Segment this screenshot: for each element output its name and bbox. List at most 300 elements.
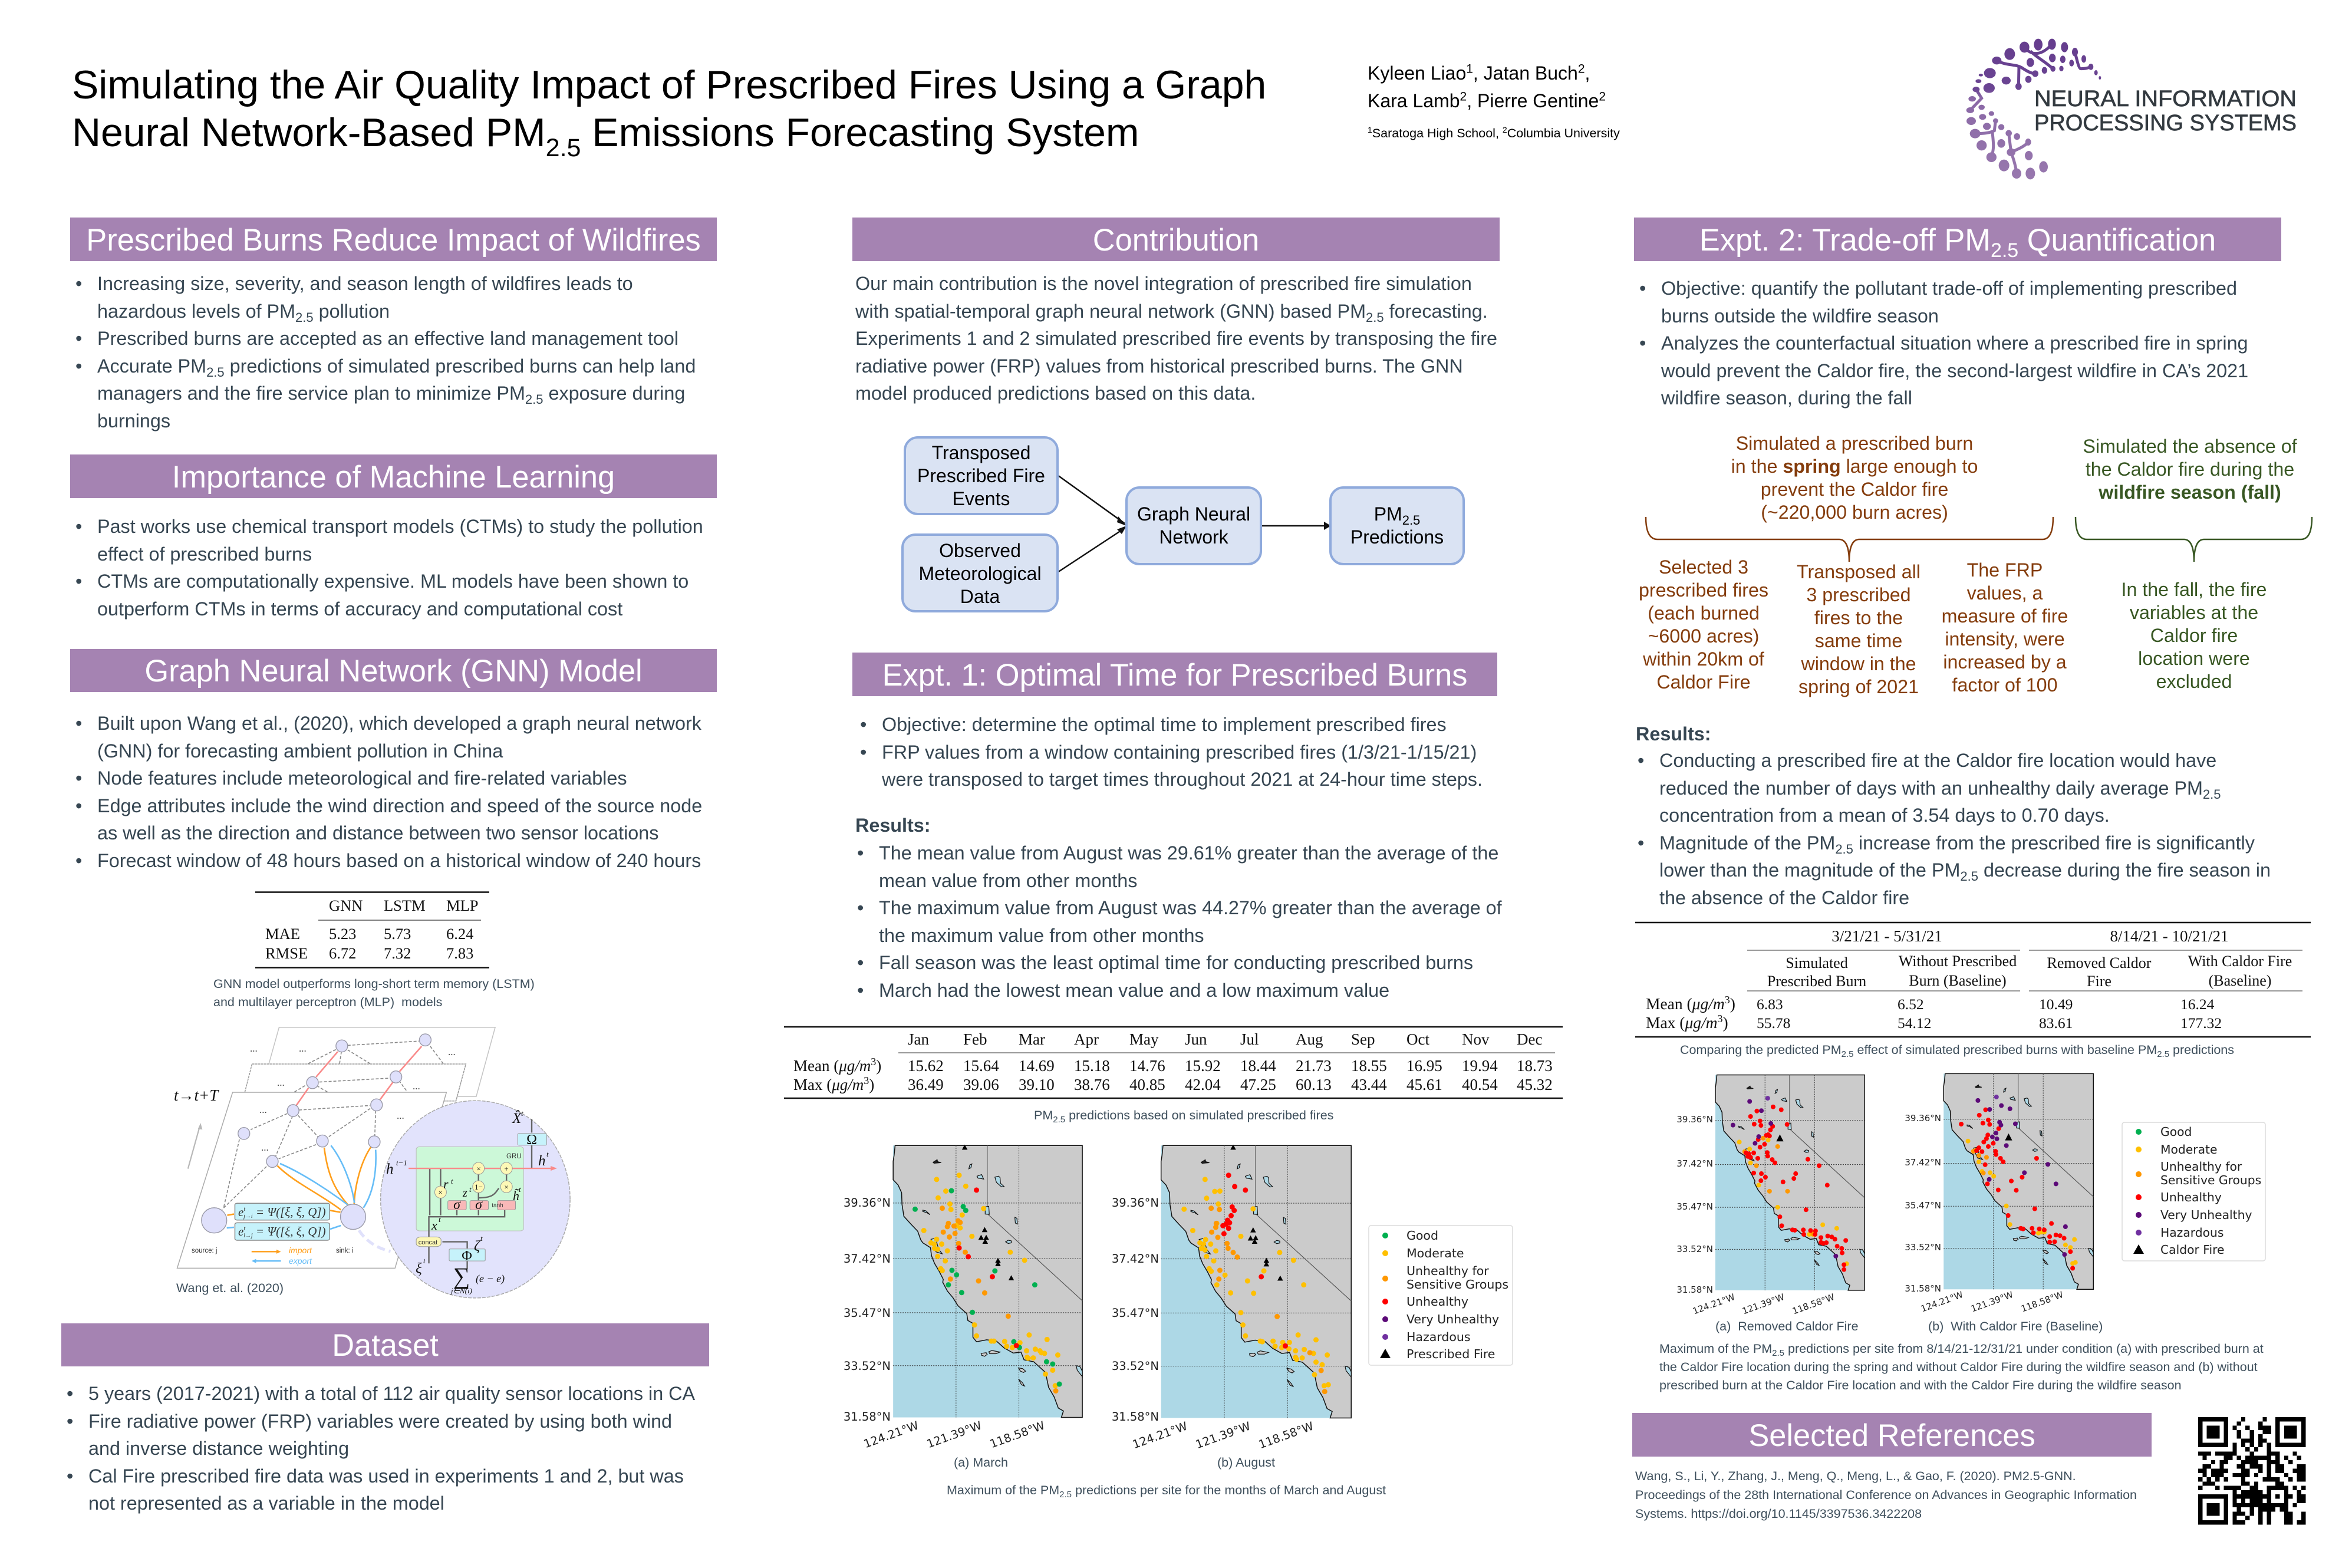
legend: Expt 2 maps: Hazardous <box>2160 1226 2223 1240</box>
step: transposed fires: spring of 2021 <box>1798 676 1919 697</box>
table: model comparison <box>255 892 489 968</box>
table: trade-off PM2.5 values: With Caldor Fire <box>2188 953 2292 970</box>
text: experiment 2 objectives: Objective: quantify the pollutant trade-off of implementing prescribed <box>1661 278 2237 299</box>
text: • <box>1638 832 1644 854</box>
table: trade-off PM2.5 values: ) <box>1730 994 1735 1013</box>
text: dataset bullets: Cal Fire prescribed fire data was used in experiments 1 and 2, but was <box>88 1465 684 1487</box>
text: machine learning bullets: CTMs are computationally expensive. ML models have been shown to <box>97 571 689 592</box>
brace: fall absence <box>2076 517 2312 562</box>
removed Caldor axis labels: 31.58°N <box>1676 1284 1713 1295</box>
text: prescribed burns bullets: Accurate PM2.5 predictions of simulated prescribed burns can help land <box>97 355 696 380</box>
heading: selected references: Selected References <box>1748 1419 2035 1453</box>
text: contribution paragraph: with spatial-temporal graph neural network (GNN) based PM2.5 forecasting. <box>855 301 1488 325</box>
text: GNN model bullets: Edge attributes include the wind direction and speed of the source node <box>97 795 702 816</box>
flow box: meteorological data: Data <box>960 586 1000 607</box>
table: trade-off PM2.5 values: 3 <box>1725 994 1730 1006</box>
caption: trade-off maps: prescribed burn at the Caldor Fire location and with the Caldor Fire during the wildfire season <box>1659 1378 2182 1392</box>
removed Caldor axis labels: 33.52°N <box>1676 1244 1713 1254</box>
caption: model comparison: GNN model outperforms long-short term memory (LSTM) <box>213 977 535 991</box>
table: monthly PM2.5 values: Oct <box>1406 1030 1429 1048</box>
table: monthly PM2.5 values: 45.61 <box>1406 1076 1442 1093</box>
diagram labels: r <box>443 1177 449 1191</box>
text: contribution paragraph <box>855 273 1497 404</box>
legend: Expt 2 maps: Unhealthy for <box>2160 1159 2242 1174</box>
caption: with Caldor map: (b) With Caldor Fire (Baseline) <box>1928 1319 2103 1333</box>
table: trade-off PM2.5 values: Without Prescribed <box>1899 953 2017 970</box>
text: prescribed burns bullets: Increasing size, severity, and season length of wildfires leads to <box>97 273 633 294</box>
table: monthly PM2.5 values: Jul <box>1240 1030 1259 1048</box>
blue export edges <box>227 1145 376 1229</box>
logo dot cluster <box>1966 39 2101 179</box>
caption: trade-off table: Comparing the predicted PM2.5 effect of simulated prescribed burns with baseline PM2.5 predictions <box>1680 1043 2234 1059</box>
callout: fall absence: Simulated the absence of <box>2083 436 2297 457</box>
with Caldor axis labels: 124.21°W <box>1919 1289 1965 1315</box>
table: trade-off PM2.5 values: 6.83 <box>1757 996 1783 1013</box>
text: contribution paragraph: Experiments 1 and 2 simulated prescribed fire events by transposing the fire <box>855 328 1497 349</box>
callout: spring burn: prevent the Caldor fire <box>1761 479 1948 500</box>
text: experiment 2 results: reduced the number of days with an unhealthy daily average PM2.5 <box>1659 778 2221 802</box>
step: fall exclusion <box>2122 579 2267 692</box>
caption: monthly maps: Maximum of the PM2.5 predictions per site for the months of March and August <box>947 1483 1386 1500</box>
text: dataset bullets: 5 years (2017-2021) with a total of 112 air quality sensor locations in CA <box>88 1383 695 1404</box>
text: • <box>857 842 864 864</box>
flow box: meteorological data <box>901 533 1059 612</box>
step: fall exclusion: Caldor fire <box>2150 625 2238 646</box>
heading: GNN model <box>70 649 717 692</box>
step: transposed fires <box>1797 561 1921 697</box>
text: reference: Proceedings of the 28th International Conference on Advances in Geographic Information <box>1635 1488 2137 1502</box>
GRU gates <box>448 1201 515 1210</box>
QR code <box>2198 1417 2305 1524</box>
callout: spring burn: in the spring large enough to <box>1731 456 1978 477</box>
table: monthly PM2.5 values: Mar <box>1019 1030 1045 1048</box>
March map with sites <box>893 1145 1082 1418</box>
title: Neural Network-Based PM2.5 Emissions Forecasting System <box>72 111 1139 162</box>
March axis labels: 124.21°W <box>862 1418 920 1451</box>
table: model comparison: LSTM <box>384 897 426 914</box>
time arrow <box>188 1126 200 1169</box>
table: monthly PM2.5 values: Sep <box>1351 1030 1375 1048</box>
text: experiment 2 objectives: Analyzes the counterfactual situation where a prescribed fire in spring <box>1661 332 2248 354</box>
table: monthly PM2.5 values: Jun <box>1185 1030 1207 1048</box>
with Caldor map with sites <box>1943 1073 2093 1289</box>
text: experiment 2 objectives <box>1639 278 2248 409</box>
step: transposed fires: window in the <box>1801 653 1916 674</box>
legend: Expt 2 maps: Good <box>2160 1125 2192 1139</box>
callout: fall absence <box>2083 436 2297 503</box>
table: monthly PM2.5 values: Apr <box>1074 1030 1099 1048</box>
hidden state line <box>409 1168 553 1169</box>
table: monthly PM2.5 values: 47.25 <box>1240 1076 1276 1093</box>
table: monthly PM2.5 values: Feb <box>963 1030 987 1048</box>
table: model comparison: 5.73 <box>384 925 411 943</box>
import / export legend arrows <box>252 1251 279 1253</box>
map: with Caldor Fire baseline <box>1905 1073 2093 1315</box>
diagram labels: e <box>238 1205 243 1219</box>
figure: GNN architecture diagram: sink: i <box>336 1247 353 1254</box>
table: trade-off PM2.5 values: 177.32 <box>2180 1014 2222 1032</box>
GRU data paths <box>429 1119 532 1269</box>
table: monthly PM2.5 values: 60.13 <box>1296 1076 1332 1093</box>
diagram labels: t <box>521 1109 523 1118</box>
text: GNN model bullets: Built upon Wang et al., (2020), which developed a graph neural network <box>97 713 701 734</box>
text: machine learning bullets <box>75 516 703 620</box>
text: • <box>75 713 82 734</box>
step: transposed fires: Transposed all <box>1797 561 1921 582</box>
step: fall exclusion: excluded <box>2156 671 2232 692</box>
table: monthly PM2.5 values: 38.76 <box>1074 1076 1110 1093</box>
text: experiment 2 objectives: wildfire season, during the fall <box>1661 387 1912 409</box>
diagram labels: h <box>538 1153 546 1169</box>
table: monthly PM2.5 values: 36.49 <box>908 1076 944 1093</box>
text: experiment 2 results <box>1638 750 2271 908</box>
table: monthly PM2.5 values: Dec <box>1517 1030 1542 1048</box>
text: experiment 1 objectives: were transposed to target times throughout 2021 at 24-hour time steps. <box>882 769 1483 790</box>
authors: Kyleen Liao1, Jatan Buch2, <box>1368 62 1590 84</box>
table: trade-off PM2.5 values: Mean ( <box>1646 994 1692 1013</box>
text: experiment 1 objectives: FRP values from a window containing prescribed fires (1/3/21-1/15/21) <box>882 742 1477 763</box>
table: monthly PM2.5 values: 21.73 <box>1296 1057 1332 1075</box>
heading: experiment 1: Expt. 1: Optimal Time for Prescribed Burns <box>882 658 1467 693</box>
diagram labels: h̃ <box>513 1188 519 1203</box>
removed Caldor axis labels: 35.47°N <box>1676 1201 1713 1212</box>
table: trade-off PM2.5 values: Prescribed Burn <box>1767 973 1866 990</box>
text: GNN model bullets: Node features include meteorological and fire-related variables <box>97 767 627 789</box>
removed Caldor axis labels: 118.58°W <box>1791 1292 1836 1317</box>
text: experiment 2 objectives: burns outside the wildfire season <box>1661 305 1939 327</box>
table: monthly PM2.5 values: μg/m <box>838 1057 871 1075</box>
table: monthly PM2.5 values: 19.94 <box>1462 1057 1498 1075</box>
step: fall exclusion: In the fall, the fire <box>2122 579 2267 600</box>
text: experiment 1 objectives <box>860 714 1483 790</box>
GRU box <box>416 1147 523 1231</box>
table: trade-off PM2.5 values: Burn (Baseline) <box>1909 972 2007 989</box>
text: prescribed burns bullets: burnings <box>97 410 170 431</box>
flow box: graph neural network: Graph Neural <box>1137 503 1250 525</box>
diagram labels: i→j <box>243 1233 253 1239</box>
legend: Expt 2 maps <box>2122 1122 2265 1261</box>
text: • <box>1639 278 1646 299</box>
removed Caldor axis labels: 124.21°W <box>1691 1292 1737 1317</box>
with Caldor axis labels: 33.52°N <box>1905 1242 1941 1253</box>
text: experiment 1 results <box>857 842 1502 1001</box>
table: trade-off PM2.5 values: 55.78 <box>1757 1014 1790 1032</box>
flow box: PM2.5 predictions: PM2.5 <box>1374 503 1420 528</box>
text: reference: Wang, S., Li, Y., Zhang, J., Meng, Q., Meng, L., & Gao, F. (2020). PM2.5-GNN. <box>1635 1469 2076 1483</box>
title <box>72 63 1266 162</box>
caption: trade-off maps: Maximum of the PM2.5 predictions per site from 8/14/21-12/31/21 under condition (a) with prescribed burn at <box>1659 1342 2264 1358</box>
step: transposed fires: same time <box>1815 630 1902 651</box>
GRU detail circle <box>381 1101 570 1298</box>
flow box: PM2.5 predictions <box>1329 486 1465 565</box>
August axis labels <box>1112 1196 1315 1451</box>
text: • <box>75 571 82 592</box>
flow box: graph neural network: Network <box>1159 526 1228 548</box>
diagram labels <box>174 1043 549 1295</box>
text: prescribed burns bullets <box>75 273 696 431</box>
step: fall exclusion: variables at the <box>2130 602 2258 623</box>
caption: model comparison: and multilayer perceptron (MLP) models <box>213 995 442 1009</box>
legend: Expt 1 maps: Prescribed Fire <box>1406 1347 1495 1361</box>
March axis labels: 35.47°N <box>844 1306 891 1320</box>
step: FRP values: intensity, were <box>1945 628 2065 650</box>
callout: spring burn <box>1731 433 1978 523</box>
text: GNN model bullets: as well as the direction and distance between two sensor locations <box>97 822 658 844</box>
diagram labels: t <box>469 1185 472 1194</box>
March axis labels: 118.58°W <box>988 1418 1046 1451</box>
table: monthly PM2.5 values: 15.18 <box>1074 1057 1110 1075</box>
table: monthly PM2.5 values: 39.10 <box>1019 1076 1055 1093</box>
step: fall exclusion: location were <box>2138 648 2250 669</box>
heading: contribution: Contribution <box>1093 223 1259 258</box>
removed Caldor map with sites <box>1715 1075 1865 1290</box>
output and phi boxes <box>518 1134 546 1145</box>
text: • <box>75 355 82 377</box>
text: • <box>67 1411 73 1432</box>
diagram labels: h <box>386 1161 394 1177</box>
text: experiment 1 results: mean value from other months <box>879 870 1137 891</box>
logo wordmark <box>2034 87 2297 136</box>
dashed graph edges <box>222 1041 443 1209</box>
diagram labels: X̂ <box>512 1110 522 1126</box>
March axis labels <box>844 1196 1046 1451</box>
August axis labels: 31.58°N <box>1112 1410 1159 1424</box>
table: model comparison: GNN <box>329 897 363 914</box>
diagram labels: × <box>476 1164 481 1173</box>
table: trade-off PM2.5 values: 54.12 <box>1898 1014 1931 1032</box>
graph nodes <box>202 1034 431 1233</box>
table: model comparison: 6.24 <box>446 925 473 943</box>
text: experiment 1 results: The maximum value from August was 44.27% greater than the average of <box>879 897 1502 918</box>
table: monthly PM2.5 values: May <box>1129 1030 1159 1048</box>
step: selected fires <box>1639 556 1768 693</box>
table: model comparison: 7.83 <box>446 944 473 962</box>
step: FRP values: increased by a <box>1943 651 2067 673</box>
August axis labels: 39.36°N <box>1112 1196 1159 1210</box>
figure: GNN architecture diagram <box>174 1027 570 1298</box>
text: GNN model bullets <box>75 713 702 871</box>
diagram labels: × <box>504 1182 509 1191</box>
text: • <box>860 742 867 763</box>
table: trade-off PM2.5 values: 10.49 <box>2039 996 2073 1013</box>
legend: Expt 1 maps: Unhealthy for <box>1406 1264 1489 1278</box>
table: monthly PM2.5 values: 45.32 <box>1517 1076 1553 1093</box>
legend: Expt 1 maps: Hazardous <box>1406 1330 1471 1344</box>
August axis labels: 37.42°N <box>1112 1252 1159 1266</box>
diagram labels: Ω <box>526 1132 537 1148</box>
text: prescribed burns bullets: managers and the fire service plan to minimize PM2.5 exposure during <box>97 383 685 407</box>
text: dataset bullets <box>67 1383 695 1514</box>
table: trade-off PM2.5 values <box>1635 923 2311 1037</box>
August axis labels: 35.47°N <box>1112 1306 1159 1320</box>
diagram labels: x <box>431 1218 437 1233</box>
diagram labels: ... <box>259 1104 267 1115</box>
text: contribution paragraph: model produced predictions based on this data. <box>855 383 1256 404</box>
figure: GNN architecture diagram: export <box>289 1256 312 1266</box>
March axis labels: 33.52°N <box>844 1359 891 1373</box>
brace: spring burn <box>1646 517 2053 562</box>
text: contribution paragraph: Our main contribution is the novel integration of prescribed fire simulation <box>855 273 1472 294</box>
red temporal edges <box>297 1046 421 1105</box>
table: model comparison: RMSE <box>265 944 308 962</box>
table: trade-off PM2.5 values: 8/14/21 - 10/21/21 <box>2110 927 2228 945</box>
table: trade-off PM2.5 values: ) <box>1723 1013 1728 1032</box>
caption: removed Caldor map: (a) Removed Caldor Fire <box>1715 1319 1859 1333</box>
table: monthly PM2.5 values: 18.44 <box>1240 1057 1276 1075</box>
heading: experiment 2 <box>1634 218 2281 261</box>
text: experiment 2 results: concentration from a mean of 3.54 days to 0.70 days. <box>1659 805 2110 826</box>
diagram labels: z <box>462 1187 467 1200</box>
diagram labels: j∈N(i) <box>450 1286 472 1295</box>
diagram labels: t <box>243 1206 245 1213</box>
step: FRP values: measure of fire <box>1942 605 2068 627</box>
flow box: meteorological data: Meteorological <box>918 563 1042 584</box>
text: experiment 1 results: The mean value from August was 29.61% greater than the average of the <box>879 842 1498 864</box>
table: monthly PM2.5 values: 15.64 <box>963 1057 999 1075</box>
legend: Expt 2 maps: Unhealthy <box>2160 1190 2222 1204</box>
diagram labels: ξ <box>416 1261 422 1277</box>
legend: Expt 1 maps: Very Unhealthy <box>1406 1312 1499 1326</box>
table: monthly PM2.5 values: 43.44 <box>1351 1076 1387 1093</box>
table: monthly PM2.5 values: 18.55 <box>1351 1057 1387 1075</box>
authors <box>1368 62 1606 111</box>
diagram labels: = Ψ([ξ, ξ, Q]) <box>253 1205 326 1219</box>
diagram labels: e <box>238 1224 243 1238</box>
removed Caldor axis labels: 39.36°N <box>1676 1114 1713 1125</box>
diagram labels: σ <box>453 1197 461 1213</box>
text: • <box>75 516 82 537</box>
flow box: PM2.5 predictions: Predictions <box>1350 526 1444 548</box>
caption: map a: (a) March <box>954 1455 1008 1470</box>
table: monthly PM2.5 values: 3 <box>864 1075 869 1086</box>
heading: contribution <box>852 218 1500 261</box>
diagram labels: (e − e) <box>476 1273 505 1285</box>
text: • <box>1638 750 1644 771</box>
text: GNN model bullets: Forecast window of 48 hours based on a historical window of 240 hours <box>97 850 701 871</box>
flow box: transposed fire events: Transposed <box>932 442 1030 463</box>
table: trade-off PM2.5 values: Removed Caldor <box>2047 954 2152 971</box>
step: selected fires: ~6000 acres) <box>1648 625 1759 647</box>
with Caldor axis labels: 35.47°N <box>1905 1200 1941 1211</box>
diagram labels: ζ <box>474 1238 481 1254</box>
diagram labels: ... <box>299 1043 307 1054</box>
with Caldor axis labels: 121.39°W <box>1969 1289 2015 1315</box>
step: selected fires: (each burned <box>1648 602 1760 624</box>
equation boxes <box>235 1203 330 1220</box>
with Caldor axis labels <box>1905 1113 2065 1315</box>
table: monthly PM2.5 values <box>784 1027 1563 1098</box>
with Caldor axis labels: 37.42°N <box>1905 1157 1941 1168</box>
table: trade-off PM2.5 values: 3/21/21 - 5/31/21 <box>1831 927 1942 945</box>
caption: diagram source: Wang et. al. (2020) <box>176 1281 284 1295</box>
table: monthly PM2.5 values: ) <box>869 1076 874 1093</box>
table: monthly PM2.5 values: Max ( <box>793 1076 832 1093</box>
text: experiment 2 objectives: would prevent the Caldor fire, the second-largest wildfire in CA’s 2021 <box>1661 360 2248 381</box>
affiliations: 1Saratoga High School, 2Columbia University <box>1368 125 1620 140</box>
caption: monthly table: PM2.5 predictions based on simulated prescribed fires <box>1034 1108 1333 1125</box>
authors: Kara Lamb2, Pierre Gentine2 <box>1368 90 1606 111</box>
table: monthly PM2.5 values: 16.95 <box>1406 1057 1442 1075</box>
step: selected fires: Caldor Fire <box>1656 671 1751 693</box>
text: experiment 1 results: March had the lowest mean value and a low maximum value <box>879 980 1389 1001</box>
removed Caldor axis labels: 121.39°W <box>1741 1292 1786 1317</box>
heading: dataset: Dataset <box>332 1329 439 1363</box>
text: experiment 2 results: lower than the magnitude of the PM2.5 decrease during the fire season in <box>1659 859 2271 884</box>
table: trade-off PM2.5 values: 3 <box>1718 1013 1723 1025</box>
removed Caldor axis labels: 37.42°N <box>1676 1158 1713 1169</box>
text: experiment 1 results: Fall season was the least optimal time for conducting prescribed burns <box>879 952 1473 973</box>
table: model comparison: 5.23 <box>329 925 356 943</box>
GRU operators <box>416 1162 512 1247</box>
diagram labels: ... <box>277 1077 285 1088</box>
legend: Expt 1 maps <box>1369 1226 1513 1365</box>
heading: experiment 2: Expt. 2: Trade-off PM2.5 Quantification <box>1699 223 2216 262</box>
text: • <box>75 328 82 349</box>
step: selected fires: within 20km of <box>1643 648 1764 670</box>
table: trade-off PM2.5 values: (Baseline) <box>2209 972 2271 989</box>
legend: Expt 2 maps: Sensitive Groups <box>2160 1173 2261 1187</box>
text: prescribed burns bullets: hazardous levels of PM2.5 pollution <box>97 301 390 325</box>
callout: spring burn: Simulated a prescribed burn <box>1736 433 1973 454</box>
table: trade-off PM2.5 values: Max ( <box>1646 1013 1685 1032</box>
table: trade-off PM2.5 values: μg/m <box>1684 1013 1718 1032</box>
diagram labels: j→i <box>242 1213 253 1220</box>
step: FRP values: The FRP <box>1967 559 2043 581</box>
callout: fall absence: wildfire season (fall) <box>2099 482 2281 503</box>
callout: fall absence: the Caldor fire during the <box>2086 459 2294 480</box>
label: experiment 1 results: Results: <box>855 815 931 836</box>
text: • <box>75 795 82 816</box>
table: trade-off PM2.5 values: Fire <box>2087 973 2111 990</box>
table: monthly PM2.5 values: Aug <box>1296 1030 1323 1048</box>
legend: Expt 1 maps: Sensitive Groups <box>1406 1277 1508 1292</box>
callout: spring burn: (~220,000 burn acres) <box>1761 502 1948 523</box>
August map with sites <box>1161 1145 1351 1418</box>
heading: prescribed burns: Prescribed Burns Reduce Impact of Wildfires <box>86 223 701 258</box>
caption: trade-off maps: the Caldor Fire location during the spring and without Caldor Fire during the wildfire season and (b) without <box>1659 1360 2258 1374</box>
caption: map b: (b) August <box>1217 1455 1275 1470</box>
table: monthly PM2.5 values: 14.76 <box>1129 1057 1165 1075</box>
text: experiment 1 results: the maximum value from other months <box>879 925 1204 946</box>
table: trade-off PM2.5 values: 16.24 <box>2180 996 2215 1013</box>
step: selected fires: Selected 3 <box>1659 556 1748 578</box>
table: monthly PM2.5 values: Nov <box>1462 1030 1490 1048</box>
text: • <box>857 897 864 918</box>
diagram labels: ∑ <box>453 1263 470 1289</box>
step: transposed fires: fires to the <box>1814 607 1903 628</box>
caption: model comparison <box>213 977 535 1009</box>
text: experiment 1 objectives: Objective: determine the optimal time to implement prescribed fires <box>882 714 1447 735</box>
flow box: graph neural network <box>1125 486 1262 565</box>
removed Caldor axis labels <box>1676 1114 1836 1317</box>
text: experiment 2 results: Conducting a prescribed fire at the Caldor fire location would have <box>1659 750 2216 771</box>
step: selected fires: prescribed fires <box>1639 579 1768 601</box>
diagram labels: ... <box>448 1046 456 1058</box>
with Caldor axis labels: 118.58°W <box>2020 1289 2065 1315</box>
flow box: transposed fire events <box>904 436 1059 515</box>
caption: trade-off maps <box>1659 1342 2264 1392</box>
step: FRP values: values, a <box>1967 582 2043 604</box>
figure: GNN architecture diagram: import <box>289 1246 312 1255</box>
diagram labels: t <box>480 1234 483 1243</box>
text: • <box>857 952 864 973</box>
table: monthly PM2.5 values: Jan <box>908 1030 929 1048</box>
map: removed Caldor Fire <box>1676 1075 1865 1317</box>
diagram labels: ... <box>250 1043 258 1054</box>
flow box: transposed fire events: Events <box>953 488 1010 509</box>
text: machine learning bullets: Past works use chemical transport models (CTMs) to study the pollution <box>97 516 703 537</box>
heading: importance of machine learning: Importance of Machine Learning <box>172 460 615 495</box>
